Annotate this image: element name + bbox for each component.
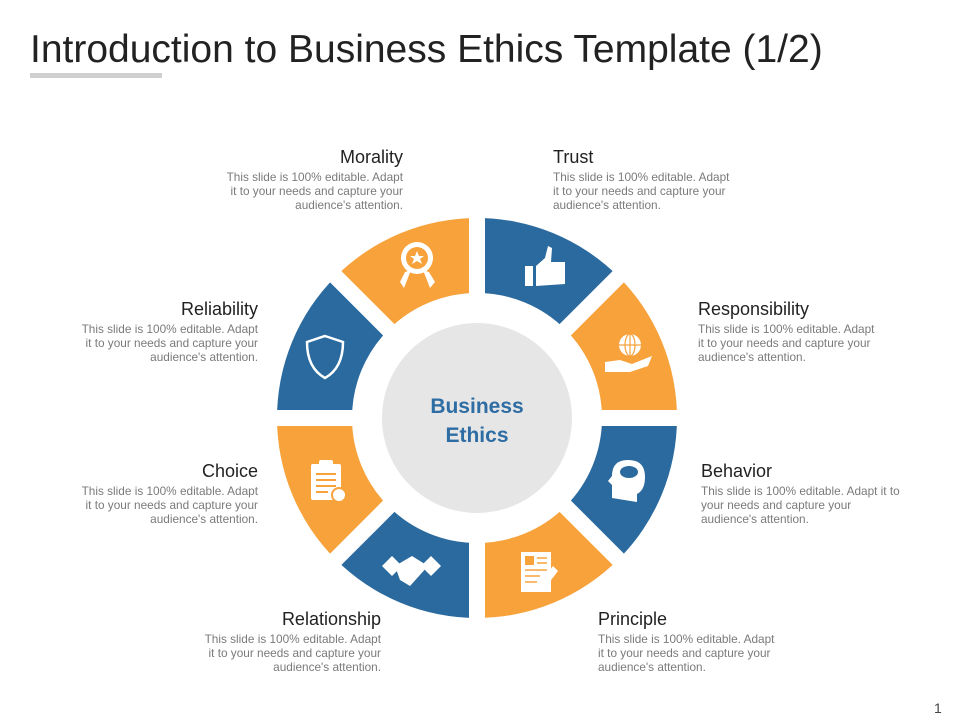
text: Reliability: This slide is 100% editable. Adapt it to your needs and capture your audience's attention. bbox=[82, 322, 258, 364]
icon: thumbs up bbox=[525, 246, 565, 286]
text: Behavior: This slide is 100% editable. Adapt it to your needs and capture your audience's attention. bbox=[701, 484, 900, 526]
text: Morality bbox=[226, 147, 403, 212]
center circle bbox=[382, 323, 572, 513]
center circle: Ethics bbox=[445, 424, 509, 447]
text: Relationship: This slide is 100% editable. Adapt it to your needs and capture your audience's attention. bbox=[205, 632, 381, 674]
text: Morality: Morality bbox=[340, 147, 403, 167]
text: Responsibility: This slide is 100% editable. Adapt it to your needs and capture your audience's attention. bbox=[698, 322, 874, 364]
text: Trust: This slide is 100% editable. Adapt it to your needs and capture your audience's attention. bbox=[553, 170, 729, 212]
text: Reliability bbox=[82, 299, 258, 364]
text: Principle bbox=[598, 609, 774, 674]
text: Trust bbox=[553, 147, 730, 212]
text: Principle: This slide is 100% editable. Adapt bbox=[598, 632, 774, 646]
text: Principle: audience's attention. bbox=[598, 660, 706, 674]
icon: head bbox=[608, 460, 645, 502]
icon: shield bbox=[307, 336, 343, 378]
text: Relationship bbox=[204, 609, 381, 674]
text: Reliability: Reliability bbox=[181, 299, 258, 319]
title underline bbox=[30, 73, 162, 78]
text: Behavior: Behavior bbox=[701, 461, 772, 481]
title: Introduction to Business Ethics Template (1/2) bbox=[30, 28, 823, 71]
text: Responsibility bbox=[698, 299, 874, 364]
icon: handshake bbox=[382, 556, 441, 586]
text: Responsibility: Responsibility bbox=[698, 299, 809, 319]
text: Trust: Trust bbox=[553, 147, 593, 167]
center circle: Business bbox=[430, 395, 524, 418]
text: Behavior bbox=[701, 461, 900, 526]
page number: 1 bbox=[934, 700, 942, 716]
icon: document with pen bbox=[521, 552, 558, 592]
text: Relationship: Relationship bbox=[282, 609, 381, 629]
text: Morality: This slide is 100% editable. Adapt it to your needs and capture your audience's attention. bbox=[227, 170, 403, 212]
text: Choice bbox=[82, 461, 258, 526]
text: Choice: Choice bbox=[202, 461, 258, 481]
text: Choice: This slide is 100% editable. Adapt it to your needs and capture your audience's attention. bbox=[82, 484, 258, 526]
icon: clipboard bbox=[311, 460, 346, 502]
icon: award bbox=[400, 242, 435, 288]
text: Principle: Principle bbox=[598, 609, 667, 629]
text: Principle: it to your needs and capture your bbox=[598, 646, 770, 660]
icon: globe in hand bbox=[605, 334, 652, 372]
